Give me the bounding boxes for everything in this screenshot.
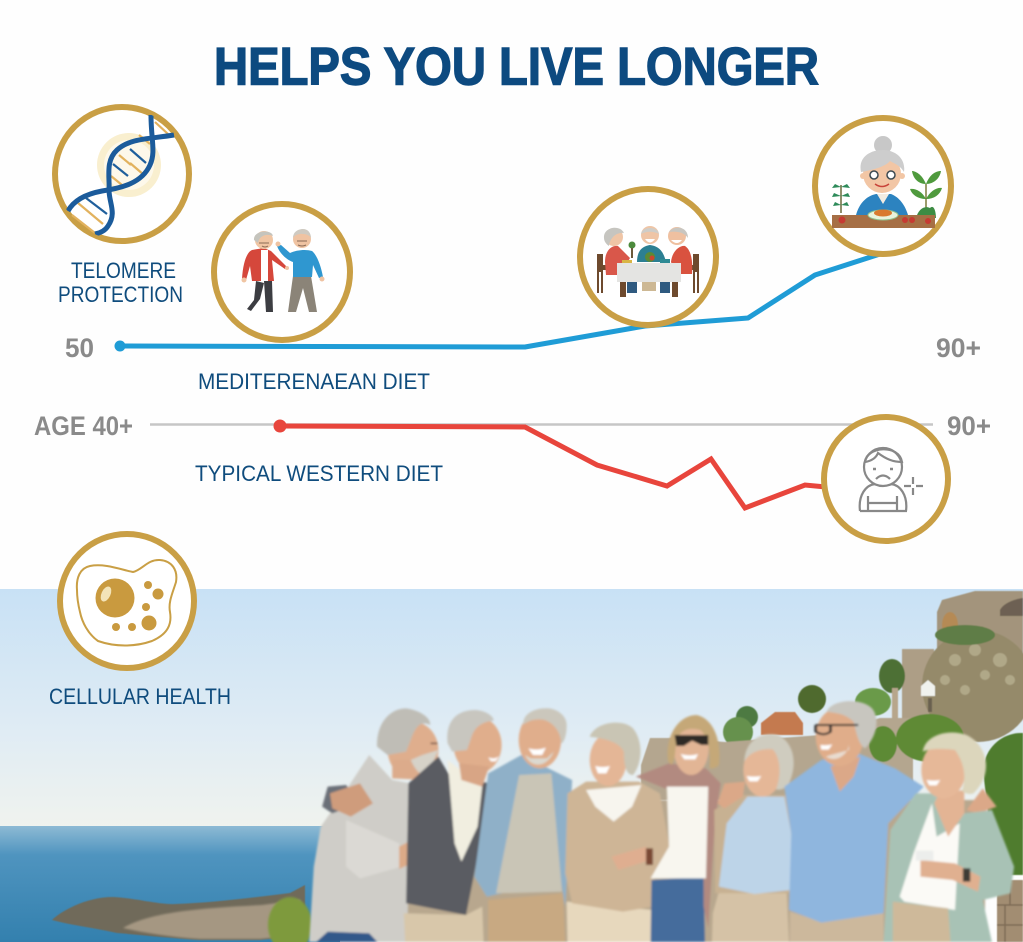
yellow-green bush [268, 897, 312, 942]
person 2: man in dark vest [322, 710, 502, 942]
person 1: man in grey shirt [309, 708, 453, 942]
red start dot [274, 420, 286, 432]
person 3: man in denim jacket [474, 708, 572, 942]
nucleus [96, 578, 134, 618]
label: age 40+: AGE 40+ [34, 411, 133, 441]
red age line [280, 426, 826, 508]
label: 50: 50 [65, 333, 94, 363]
sea [0, 826, 340, 942]
label: telomere protection: PROTECTION [58, 282, 183, 307]
rocky headland [52, 885, 305, 940]
man in red cardigan [242, 231, 289, 312]
table and plate [832, 215, 935, 228]
person 7: man in blue shirt [784, 701, 997, 942]
label: Mediterenaean diet: MEDITERENAEAN DIET [198, 369, 430, 394]
person 5: woman in plaid shirt [636, 715, 721, 942]
diners [604, 226, 692, 275]
label: cellular health: CELLULAR HEALTH [49, 684, 231, 709]
title: HELPS YOU LIVE LONGER [214, 38, 819, 96]
backing fill between figures [405, 800, 985, 942]
table and food [617, 263, 681, 282]
person 4: woman in beige sweater [565, 723, 671, 942]
icon: seniors at dinner table [580, 189, 716, 325]
sky [0, 589, 1023, 829]
icon: senior woman with healthy food [815, 118, 951, 254]
group of eight seniors [309, 701, 1014, 942]
chairs [597, 254, 699, 293]
person 8: woman in mint cardigan [884, 732, 1014, 942]
line chart: Mediterranean diet [114, 254, 880, 352]
label: typical western diet: TYPICAL WESTERN DIET [195, 461, 443, 486]
woman [856, 194, 908, 215]
body [860, 484, 907, 511]
person 6: woman in light blue shirt [712, 734, 798, 942]
man in blue sweater [276, 229, 324, 312]
head [864, 448, 902, 486]
label: 90+ lower: 90+ [947, 411, 991, 441]
organelles [112, 581, 164, 631]
icon: DNA telomere [55, 107, 189, 241]
hillside with buildings and trees [641, 591, 1023, 942]
photo: seniors by the sea [0, 589, 1023, 942]
line chart: Western diet [150, 420, 933, 508]
label: telomere protection: TELOMERE [71, 258, 176, 283]
label: 90+ upper: 90+ [936, 333, 981, 363]
plants [840, 185, 842, 213]
icon: unhappy person [824, 417, 948, 541]
grey age baseline [150, 423, 933, 426]
icon: cellular health [60, 534, 194, 668]
cell membrane [77, 560, 176, 646]
icon: two seniors walking [214, 204, 350, 340]
blue age line [120, 254, 880, 347]
blue start dot [114, 340, 126, 352]
sparkle [904, 477, 923, 495]
